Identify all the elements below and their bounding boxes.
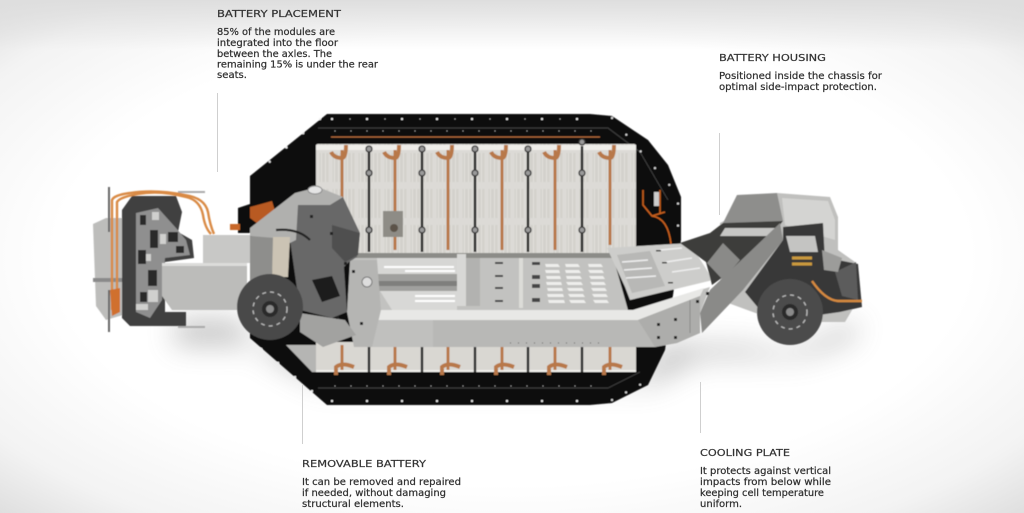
text: cooling plate <box>700 448 831 510</box>
text: removable battery: It can be removed and repaired <box>302 477 461 488</box>
battery modules bottom <box>286 342 636 375</box>
text: battery placement <box>217 9 378 81</box>
text: battery housing: optimal side-impact protection. <box>719 82 877 93</box>
rear orange cable <box>812 281 862 301</box>
text: cooling plate: It protects against vertical <box>700 466 831 477</box>
rear angled panel <box>607 243 713 300</box>
text: battery placement: BATTERY PLACEMENT <box>217 9 342 20</box>
text: battery placement: 85% of the modules are <box>217 27 335 38</box>
front node <box>347 260 381 347</box>
front brake disc <box>237 274 303 340</box>
longitudinal rail <box>350 287 710 347</box>
rear housing and suspension <box>680 193 862 333</box>
text: removable battery: if needed, without damaging <box>302 488 446 499</box>
floor slits <box>545 264 609 303</box>
text: removable battery: REMOVABLE BATTERY <box>302 459 427 470</box>
text: cooling plate: impacts from below while <box>700 477 831 488</box>
battery modules top <box>316 139 636 255</box>
text: battery placement: seats. <box>217 70 247 81</box>
text: cooling plate: uniform. <box>700 499 742 510</box>
chassis illustration <box>93 114 862 405</box>
connector block <box>383 211 403 237</box>
black battery frame <box>238 114 681 405</box>
text: removable battery <box>302 459 461 510</box>
orange bracket <box>230 201 276 230</box>
orange straps <box>331 145 614 250</box>
module separators <box>369 146 582 252</box>
text: battery housing: Positioned inside the chassis for <box>719 71 882 82</box>
wiring in frame right <box>643 190 671 244</box>
text: battery placement: integrated into the floor <box>217 38 338 49</box>
text: cooling plate: keeping cell temperature <box>700 488 824 499</box>
text: battery housing <box>719 53 882 93</box>
text: removable battery: structural elements. <box>302 499 404 510</box>
left floor pans <box>377 258 457 274</box>
leader lines <box>218 93 720 444</box>
front strut tower <box>250 186 360 347</box>
text: battery placement: remaining 15% is under the rear <box>217 60 378 70</box>
text: battery placement: between the axles. The <box>217 49 332 60</box>
upper box and beam <box>162 235 250 310</box>
main floor <box>350 253 628 310</box>
orange cables <box>112 191 214 312</box>
text: cooling plate: COOLING PLATE <box>700 448 790 459</box>
motor assembly left <box>93 187 214 332</box>
text: battery housing: BATTERY HOUSING <box>719 53 826 64</box>
rear brake disc <box>757 279 823 345</box>
drop shadow <box>175 320 860 385</box>
frame bolts <box>253 118 678 401</box>
diagonal arm <box>700 223 783 333</box>
